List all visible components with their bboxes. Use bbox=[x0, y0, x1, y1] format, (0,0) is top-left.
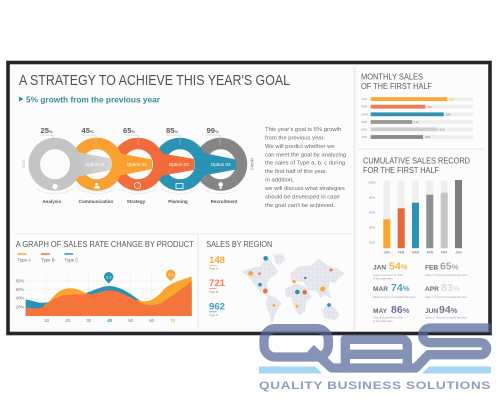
world map bbox=[242, 253, 345, 325]
panel: strategy ring diagram bbox=[21, 126, 254, 204]
percentage labels bbox=[40, 126, 219, 135]
bar chart: 390 bbox=[427, 105, 432, 109]
column chart: JAN bbox=[384, 250, 391, 254]
monthly percentages: MAY bbox=[373, 308, 388, 315]
monthly percentages: 86% bbox=[391, 304, 410, 316]
bar chart: 533 bbox=[449, 97, 454, 101]
heading: OF THE FIRST HALF bbox=[361, 82, 432, 91]
area chart: 10 bbox=[44, 318, 50, 323]
area chart bbox=[16, 270, 192, 323]
monthly percentages: JUN bbox=[425, 308, 438, 315]
monthly percentages: 65% bbox=[440, 260, 459, 272]
dashed arcs bbox=[36, 189, 240, 194]
text block: goal description: This year's goal is 5% growth bbox=[265, 127, 341, 133]
area chart: 30 bbox=[86, 318, 92, 323]
monthly percentages: Type B accounts for 14% bbox=[373, 316, 403, 320]
monthly percentages: Sales of Type C increased the most bbox=[373, 295, 416, 299]
area chart: 20 bbox=[65, 318, 71, 323]
heading bbox=[361, 72, 432, 91]
column chart: JUN bbox=[455, 250, 462, 254]
bar chart: MAY bbox=[362, 127, 367, 131]
region figures: 962 bbox=[209, 301, 225, 312]
monthly percentages: MAR bbox=[373, 286, 388, 293]
region figures: Type C bbox=[209, 313, 218, 317]
bar chart: 342 bbox=[446, 112, 451, 116]
column chart: APR bbox=[427, 250, 434, 254]
heading: A GRAPH OF SALES RATE CHANGE BY PRODUCT bbox=[16, 240, 194, 249]
logo accent bars bbox=[259, 366, 491, 374]
column chart: 40% bbox=[369, 226, 375, 230]
watermark: QBS logo bbox=[259, 328, 491, 392]
region figures: 721 bbox=[209, 278, 226, 289]
monthly percentages: Type C accounts for 30% bbox=[373, 273, 404, 277]
title: A STRATEGY TO ACHIEVE THIS YEAR'S GOAL bbox=[19, 72, 290, 89]
bar chart: JAN bbox=[362, 97, 367, 101]
bar chart: 510 bbox=[440, 128, 445, 132]
bar chart: APR bbox=[362, 120, 367, 124]
step labels: Recruitment bbox=[211, 199, 238, 204]
bar chart: 264 bbox=[425, 135, 430, 139]
legend bbox=[17, 253, 78, 262]
icons bbox=[52, 182, 223, 189]
monthly percentages: 54% bbox=[389, 260, 408, 272]
column chart: 20% bbox=[369, 240, 375, 244]
logo letters bbox=[264, 328, 491, 368]
area chart: 60 bbox=[149, 318, 155, 323]
area chart: 70 bbox=[170, 318, 176, 323]
leader lines bbox=[40, 135, 220, 145]
bar chart: JUN bbox=[362, 135, 367, 139]
pin: blue marker bbox=[104, 272, 113, 283]
subtitle: 5% growth from the previous year bbox=[26, 95, 160, 104]
text block: goal description: can meet the goal by analyzing bbox=[265, 152, 346, 158]
pin: yellow marker: 4.5 bbox=[168, 272, 174, 277]
column chart: MAR bbox=[412, 250, 420, 254]
area chart: 60% bbox=[16, 287, 24, 292]
option labels: Option 03 bbox=[169, 162, 189, 167]
text block: goal description: We will predict whether we bbox=[265, 144, 335, 150]
bar chart: FEB bbox=[362, 105, 367, 109]
text block: goal description: In addition, bbox=[265, 177, 294, 183]
bar chart: 111 bbox=[414, 120, 419, 124]
region figures bbox=[209, 255, 226, 317]
step labels: Strategy bbox=[127, 199, 146, 204]
percentage labels: 99% bbox=[206, 126, 219, 135]
option labels bbox=[85, 162, 231, 167]
monthly percentages: JAN bbox=[373, 264, 386, 272]
monthly percentages: of the total sales bbox=[373, 319, 393, 323]
legend: Type B bbox=[41, 258, 55, 262]
percentage labels: 65% bbox=[123, 126, 135, 135]
option labels: Option 04 bbox=[211, 162, 231, 167]
heading: MONTHLY SALES bbox=[361, 72, 423, 82]
ring: strategy bbox=[117, 144, 159, 185]
start label: Start bbox=[21, 159, 26, 169]
percentage labels: 25% bbox=[40, 126, 53, 135]
panel: cumulative sales record bbox=[363, 156, 470, 323]
legend: Type C bbox=[64, 258, 78, 262]
option labels: Option 01 bbox=[85, 162, 105, 167]
text block: goal description: we will discuss what strategies bbox=[264, 186, 345, 192]
heading: CUMULATIVE SALES RECORD bbox=[363, 156, 470, 165]
step labels: Planning bbox=[168, 199, 188, 204]
legend: Type A bbox=[18, 258, 31, 262]
panel: sales rate by product bbox=[16, 240, 194, 323]
monitor frame bbox=[8, 62, 490, 334]
column chart bbox=[368, 180, 462, 254]
panel: sales by region bbox=[206, 240, 345, 325]
column chart: 60% bbox=[369, 210, 375, 214]
text block: goal description: the goal can't be achieved. bbox=[265, 203, 335, 209]
ring: planning bbox=[159, 144, 201, 185]
monthly percentages: APR bbox=[425, 286, 439, 293]
heading: FOR THE FIRST HALF bbox=[363, 166, 439, 175]
region figures: Type A bbox=[209, 266, 218, 270]
step labels bbox=[42, 199, 238, 204]
finish label: Finish bbox=[250, 158, 254, 170]
text block: goal description: the first half of this year. bbox=[265, 169, 328, 175]
area chart: 50 bbox=[128, 318, 134, 323]
monthly percentages: of the total sales bbox=[373, 276, 393, 280]
ring: analysis bbox=[34, 144, 76, 185]
text block: goal description: the sales of Type a, b, c during bbox=[265, 161, 345, 167]
column chart: 100% bbox=[368, 180, 376, 184]
option labels: Option 02 bbox=[127, 162, 147, 167]
monthly percentages: FEB bbox=[425, 264, 438, 272]
monthly percentages: 74% bbox=[391, 282, 410, 294]
area chart: 40% bbox=[16, 296, 24, 301]
text block: goal description: should be developed in case bbox=[265, 194, 340, 200]
monthly percentages bbox=[373, 260, 468, 323]
bar chart bbox=[362, 97, 473, 139]
area chart: 40 bbox=[107, 318, 113, 323]
heading: SALES BY REGION bbox=[206, 240, 272, 249]
area chart: 80% bbox=[16, 278, 24, 283]
column chart: FEB bbox=[398, 250, 404, 254]
pin: yellow marker bbox=[166, 270, 175, 281]
monthly percentages: Sales of Type B increased the most bbox=[425, 316, 467, 320]
monthly percentages: 83% bbox=[441, 282, 460, 294]
bar chart: MAR bbox=[362, 112, 368, 116]
panel: monthly sales bbox=[361, 72, 473, 139]
region figures: 148 bbox=[209, 255, 226, 266]
step labels: Analysis bbox=[42, 199, 62, 204]
heading bbox=[363, 156, 470, 175]
ring: recruitment bbox=[200, 144, 241, 185]
monthly percentages: 94% bbox=[439, 304, 458, 316]
region figures: Type B bbox=[209, 290, 218, 294]
percentage labels: 85% bbox=[166, 126, 178, 135]
text block: goal description bbox=[264, 127, 346, 209]
text block: goal description: from the previous year. bbox=[265, 136, 325, 142]
ring: communication bbox=[76, 144, 117, 185]
step labels: Communication bbox=[79, 199, 114, 204]
percentage labels: 45% bbox=[82, 126, 94, 135]
column chart: 80% bbox=[369, 196, 375, 200]
column chart: MAY bbox=[441, 250, 448, 254]
monthly percentages: Sales of Type C increased the most bbox=[425, 273, 468, 277]
monthly percentages: Sales of Type B increased the most bbox=[425, 295, 467, 299]
logo wordmark: QUALITY BUSINESS SOLUTIONS bbox=[259, 380, 491, 392]
pin: blue marker: 3.2 bbox=[106, 274, 112, 279]
area chart: 20% bbox=[16, 304, 24, 309]
